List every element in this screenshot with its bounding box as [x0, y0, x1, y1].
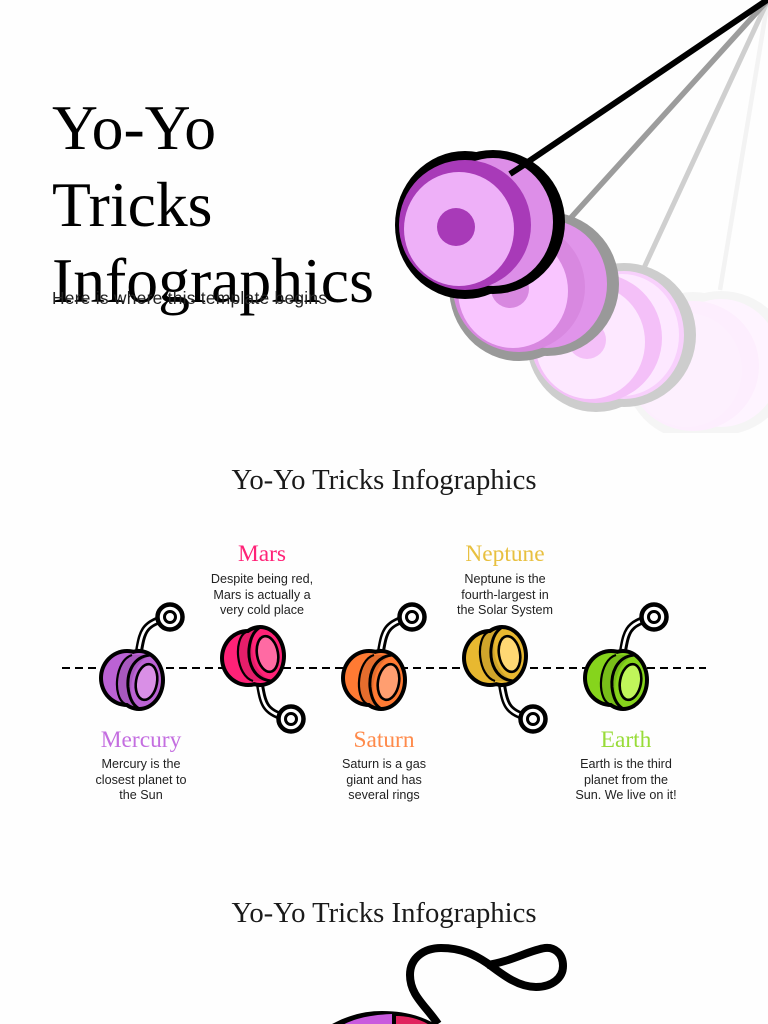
text: Earth description: planet from the — [584, 772, 668, 786]
yo-yo string — [510, 0, 768, 174]
text: Mercury description: closest planet to — [95, 772, 186, 786]
text: Saturn description: Saturn is a gas — [342, 757, 426, 771]
text: Mercury description: Mercury is the — [101, 757, 181, 771]
heading: second section: Yo-Yo Tricks Infographics — [231, 897, 536, 929]
yo-yo timeline — [62, 602, 706, 734]
icon: Mars yo-yo — [220, 625, 304, 732]
icon: Earth yo-yo — [583, 604, 666, 711]
heading: timeline section: Yo-Yo Tricks Infographics — [231, 464, 536, 496]
text: Earth description: Sun. We live on it! — [575, 788, 677, 802]
text: Mercury description: the Sun — [119, 788, 163, 802]
text: Mars description: very cold place — [220, 603, 304, 617]
large yo-yo body — [322, 1011, 445, 1024]
title — [52, 92, 374, 316]
text: Neptune description: fourth-largest in — [461, 588, 549, 602]
large yo-yo string — [410, 948, 563, 1024]
title: Yo-Yo — [52, 92, 216, 163]
text: Earth description: Earth is the third — [580, 757, 672, 771]
text: Mars description: Despite being red, — [211, 572, 313, 586]
label: Saturn: Saturn — [353, 727, 415, 753]
subtitle: Here is where this template begins — [52, 288, 327, 308]
title: Tricks — [52, 168, 212, 240]
hero illustration: swinging yo-yo — [395, 0, 768, 433]
yo-yo ghost 2 — [449, 0, 768, 361]
label: Mars: Mars — [238, 541, 286, 567]
title: Infographics — [52, 245, 374, 316]
text: Neptune description: Neptune is the — [464, 572, 546, 586]
text: Neptune description: the Solar System — [457, 603, 553, 617]
text: Mars description — [211, 572, 313, 617]
text: Mars description: Mars is actually a — [213, 588, 311, 602]
icon: Neptune yo-yo — [462, 625, 546, 732]
text: Saturn description: giant and has — [346, 772, 422, 786]
yo-yo ghost 3 — [526, 0, 768, 412]
yo-yo main — [395, 0, 768, 299]
icon: Saturn yo-yo — [341, 604, 424, 711]
icon: Mercury yo-yo — [99, 604, 182, 711]
yo-yo ghost 4 — [623, 0, 768, 440]
label: Earth: Earth — [601, 727, 651, 753]
label: Mercury: Mercury — [101, 727, 181, 753]
text: Mercury description — [95, 757, 186, 802]
text: Earth description — [575, 757, 677, 802]
text: Saturn description — [342, 757, 426, 802]
text: Neptune description — [457, 572, 553, 617]
label: Neptune: Neptune — [465, 541, 545, 567]
text: Saturn description: several rings — [348, 788, 420, 802]
